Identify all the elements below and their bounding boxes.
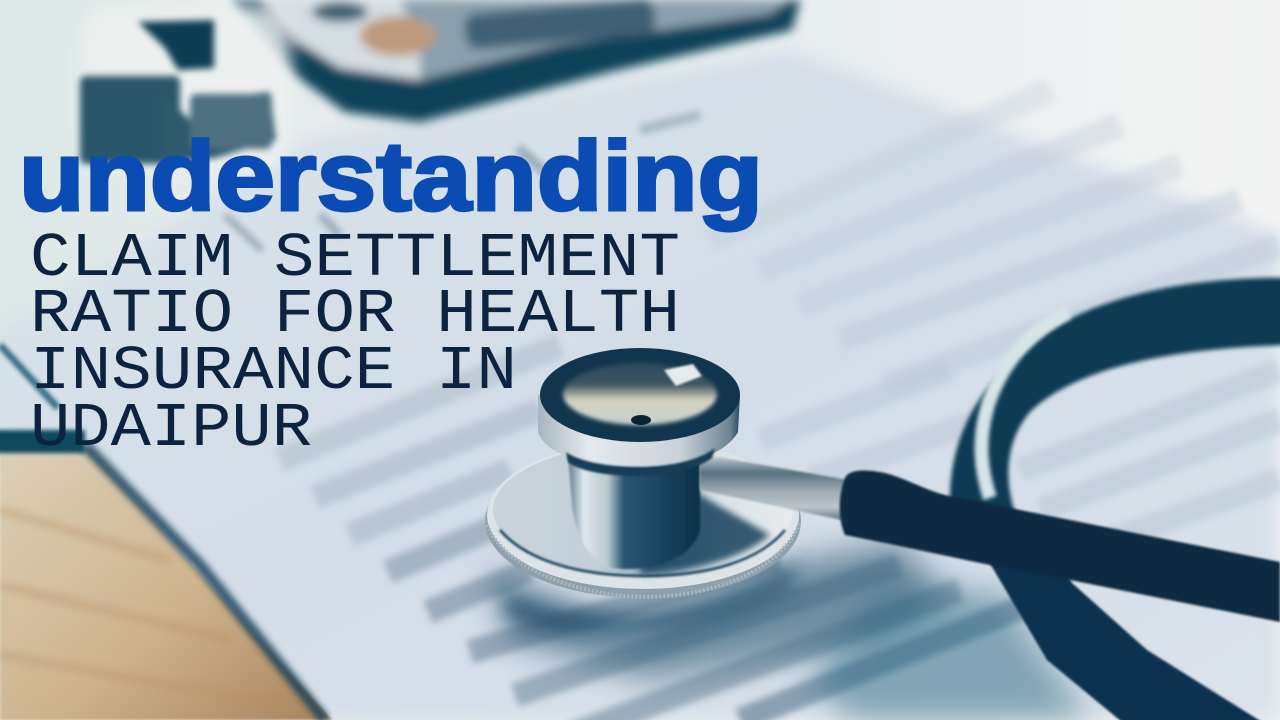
lens: [563, 363, 717, 425]
subheading: claim settlement ratio: [30, 223, 680, 464]
title: [19, 121, 763, 464]
subheading: claim settlement ratio: RATIO FOR HEALTH: [30, 279, 680, 350]
subheading: claim settlement ratio: UDAIPUR: [30, 393, 312, 464]
shadow under stethoscope: [490, 540, 1090, 720]
heading: understanding: understanding: [19, 121, 763, 231]
subheading: claim settlement ratio: INSURANCE IN: [30, 336, 517, 407]
subheading: claim settlement ratio: CLAIM SETTLEMENT: [30, 223, 680, 294]
silver band: [538, 395, 740, 468]
base disc: [485, 441, 801, 598]
chart: printed table stripes on paper: [280, 90, 1280, 720]
lower tube: [985, 555, 1262, 720]
dark tube: [840, 471, 1280, 622]
icon: blurred coin stacks: [80, 5, 290, 170]
head rim: [540, 348, 740, 442]
chart: blurred smudges behind title: [225, 115, 700, 250]
icon: stethoscope tube loop: [950, 278, 1280, 720]
stem: [700, 457, 848, 520]
icon: blurred calculator: [232, 0, 800, 122]
icon: stethoscope chest piece: [485, 348, 1280, 622]
panel: wooden table: [0, 345, 332, 720]
neck: [568, 455, 700, 569]
